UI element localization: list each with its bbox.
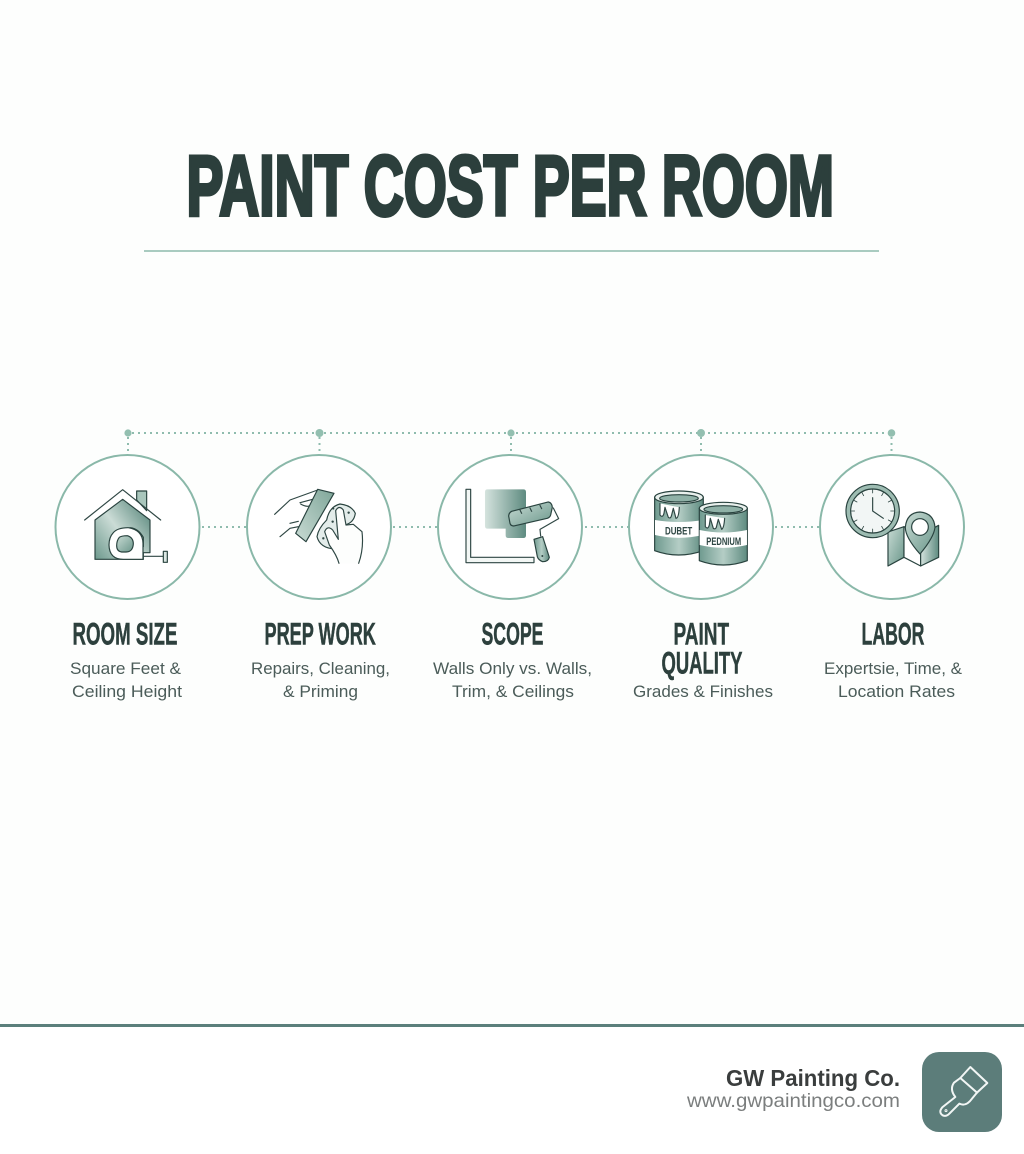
description: room size: Ceiling Height <box>72 683 182 701</box>
heading: paint quality: QUALITY <box>662 647 742 681</box>
description: scope: Trim, & Ceilings <box>452 683 574 701</box>
icon: wall corner, paint patch and roller <box>466 489 559 563</box>
clock <box>846 484 899 538</box>
icon: paint cans <box>655 491 747 565</box>
description: labor: Expertsie, Time, & <box>824 660 962 678</box>
description: paint quality: Grades & Finishes <box>633 683 773 701</box>
step: room size <box>56 455 200 701</box>
circle: room size <box>56 455 200 599</box>
can: budget: DUBET <box>665 525 692 538</box>
step: scope <box>433 455 592 701</box>
icon: paintbrush logo <box>922 1052 1002 1132</box>
circle: scope <box>438 455 582 599</box>
description: labor: Location Rates <box>838 683 955 701</box>
heading: prep work: PREP WORK <box>264 618 376 652</box>
footer <box>0 1024 1024 1154</box>
circle: labor <box>820 455 964 599</box>
heading: paint quality <box>662 615 742 681</box>
can: premium: PEDNIUM <box>706 536 741 547</box>
icon: clock and map pin <box>846 484 939 566</box>
icon: house with tape measure <box>85 490 167 562</box>
heading: paint quality: PAINT <box>674 615 729 652</box>
step: labor <box>820 455 964 701</box>
title: PAINT COST PER ROOM <box>186 139 834 234</box>
step: prep work <box>247 455 391 701</box>
description: room size <box>70 660 182 701</box>
description: scope <box>433 660 592 701</box>
heading: room size: ROOM SIZE <box>72 618 177 652</box>
heading: labor: LABOR <box>862 617 924 652</box>
description: scope: Walls Only vs. Walls, <box>433 660 592 678</box>
circle: prep work <box>247 455 391 599</box>
circle: paint quality <box>629 455 773 599</box>
map <box>888 525 939 566</box>
website: www.gwpaintingco.com <box>686 1090 900 1112</box>
connector timeline <box>124 429 895 527</box>
description: prep work: & Priming <box>283 683 358 701</box>
description: prep work <box>251 660 390 701</box>
map pin <box>905 512 935 554</box>
icon: hands with scraper and patches <box>275 489 363 563</box>
description: room size: Square Feet & <box>70 660 181 678</box>
description: prep work: Repairs, Cleaning, <box>251 660 390 678</box>
heading: scope: SCOPE <box>482 617 543 652</box>
step: paint quality <box>629 455 773 701</box>
description: labor <box>824 660 962 701</box>
brand name: GW Painting Co. <box>726 1065 900 1091</box>
